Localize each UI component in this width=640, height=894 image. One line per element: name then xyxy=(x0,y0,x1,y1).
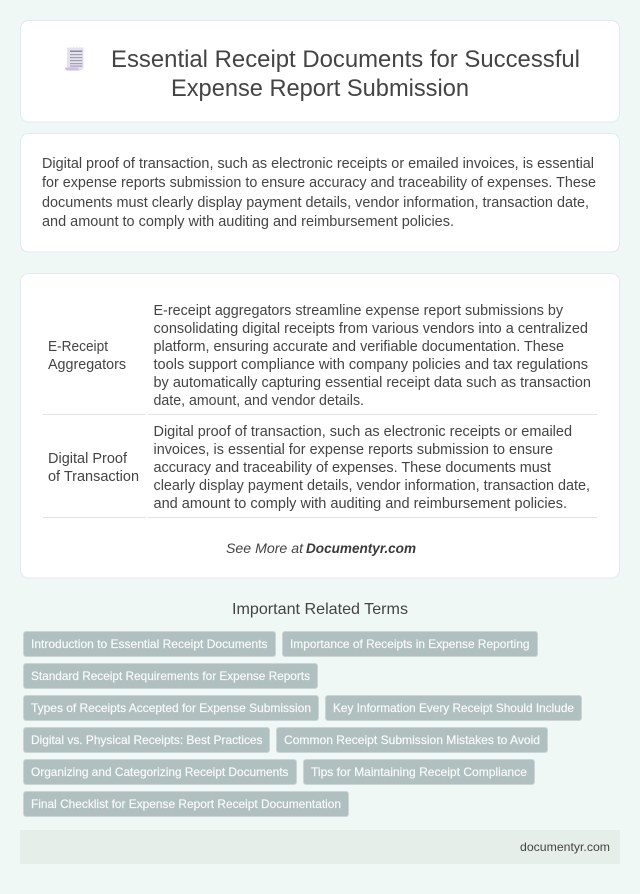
tag xyxy=(24,760,296,784)
tag: Importance of Receipts in Expense Reporting xyxy=(290,637,530,651)
row description: accuracy and traceability of expenses. These documents must xyxy=(154,460,551,476)
summary text: and amount to comply with auditing and reimbursement policies. xyxy=(42,214,454,230)
tag xyxy=(24,728,270,752)
row description: date, amount, and vendor details. xyxy=(154,393,364,409)
tag xyxy=(276,728,548,752)
tag xyxy=(24,696,318,720)
row description: clearly display payment details, vendor information, transaction date, xyxy=(154,478,590,494)
see more link: See More at xyxy=(226,540,304,556)
heading: Important Related Terms: Important Related Terms xyxy=(232,601,408,618)
tag: Types of Receipts Accepted for Expense Submission xyxy=(31,701,311,715)
row label: E-Receipt xyxy=(48,339,108,355)
row description: consolidating digital receipts from various vendors into a centralized xyxy=(154,321,588,337)
tag: Standard Receipt Requirements for Expense Reports xyxy=(31,669,310,683)
see more link xyxy=(226,540,416,556)
row label: Aggregators xyxy=(48,357,126,373)
row label: of Transaction xyxy=(48,469,139,485)
row description xyxy=(154,303,591,409)
tag: Organizing and Categorizing Receipt Documents xyxy=(31,765,288,779)
footer bar: documentyr.com xyxy=(520,840,610,854)
panel: title card xyxy=(20,20,620,122)
title: Essential Receipt Documents for Successful xyxy=(111,46,580,73)
tag xyxy=(24,792,348,816)
title: Expense Report Submission xyxy=(171,75,469,102)
tag: Key Information Every Receipt Should Include xyxy=(333,701,574,715)
tag: Tips for Maintaining Receipt Compliance xyxy=(311,765,527,779)
row description: invoices, is essential for expense reports submission to ensure xyxy=(154,442,553,458)
tag xyxy=(24,632,276,656)
summary text: documents must clearly display payment details, vendor information, transaction date, xyxy=(42,195,589,211)
summary text xyxy=(42,156,596,230)
row label xyxy=(48,339,126,373)
tag xyxy=(326,696,582,720)
tag xyxy=(24,664,318,688)
row description: platform, ensuring accurate and verifiable documentation. These xyxy=(154,339,564,355)
row description: Digital proof of transaction, such as electronic receipts or emailed xyxy=(154,424,572,440)
footer bar xyxy=(20,830,620,864)
summary text: for expense reports submission to ensure accuracy and traceability of expenses. These xyxy=(42,175,596,191)
row label: Digital Proof xyxy=(48,451,128,467)
icon: receipt document xyxy=(65,47,84,70)
title xyxy=(111,46,580,102)
tag: Final Checklist for Expense Report Receipt Documentation xyxy=(31,797,341,811)
row description: E-receipt aggregators streamline expense report submissions by xyxy=(154,303,564,319)
table row: Digital Proof of Transaction xyxy=(48,424,590,512)
see more link: Documentyr.com xyxy=(306,540,416,556)
tag xyxy=(282,632,538,656)
panel: summary card xyxy=(20,134,620,252)
related terms tags xyxy=(24,632,582,816)
tag xyxy=(304,760,534,784)
summary text: Digital proof of transaction, such as electronic receipts or emailed invoices, is essential xyxy=(42,156,594,172)
table row: E-Receipt Aggregators xyxy=(48,303,591,409)
row description: by automatically capturing essential receipt data such as transaction xyxy=(154,375,591,391)
tag: Common Receipt Submission Mistakes to Avoid xyxy=(284,733,540,747)
row description: and amount to comply with auditing and reimbursement policies. xyxy=(154,496,567,512)
tag: Digital vs. Physical Receipts: Best Practices xyxy=(31,733,262,747)
row label xyxy=(48,451,139,485)
row description xyxy=(154,424,590,512)
tag: Introduction to Essential Receipt Documents xyxy=(31,637,268,651)
panel: details table card xyxy=(20,274,620,578)
row description: tools support compliance with company policies and tax regulations xyxy=(154,357,588,373)
